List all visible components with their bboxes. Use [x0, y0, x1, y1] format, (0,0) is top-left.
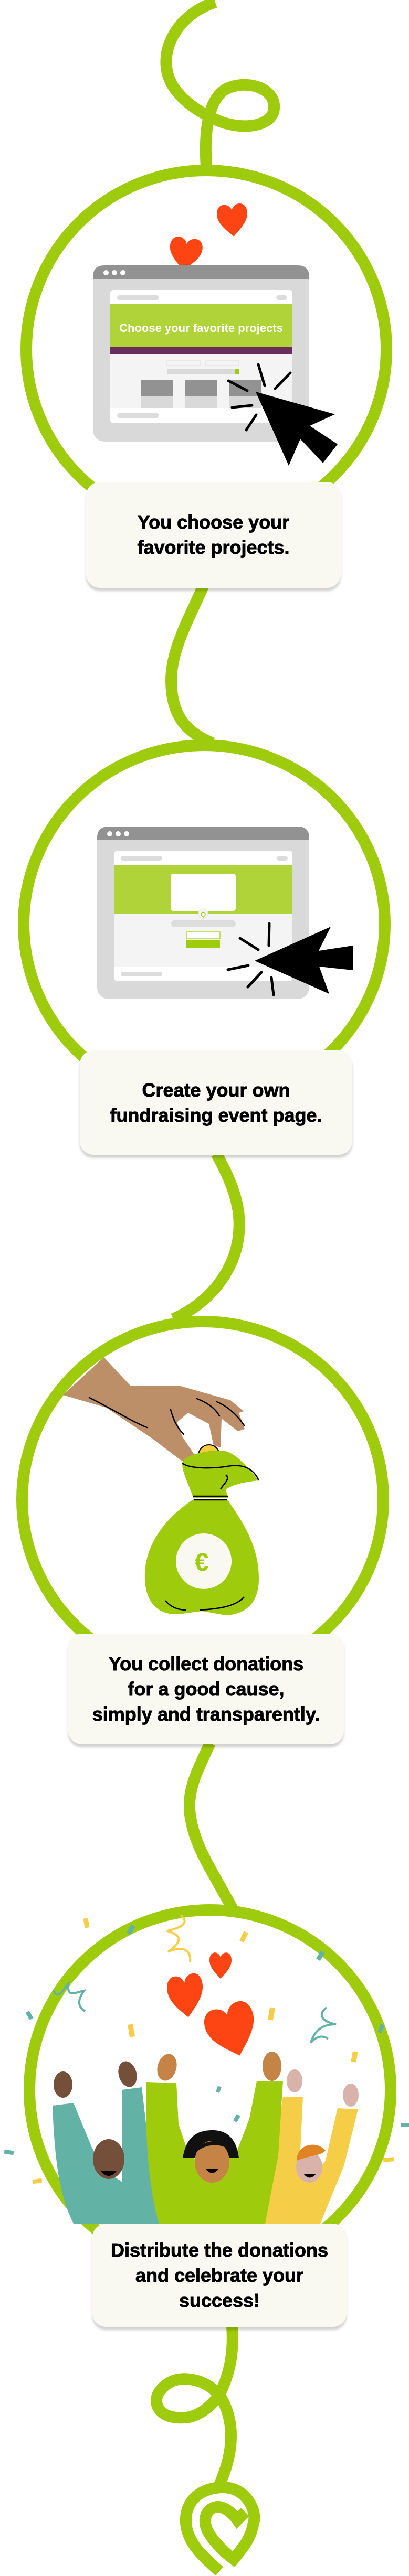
browser: fundraising page [97, 827, 309, 999]
callout: step 3: for a good cause, [128, 1678, 285, 1699]
callout: step 4 [92, 2224, 347, 2327]
money bag: € [195, 1549, 208, 1576]
person: teal sweater [53, 2059, 159, 2224]
browser: choose projects [93, 265, 309, 442]
logo: heart vine [186, 2487, 254, 2571]
ring: step 1 [26, 170, 386, 528]
cursor: step 1 [228, 364, 338, 466]
callout: step 2: fundraising event page. [110, 1104, 322, 1125]
callout: step 4: Distribute the donations [111, 2239, 328, 2260]
vine: stem connecting all steps [156, 2, 274, 2485]
ring: step 2 [24, 745, 385, 1103]
money bag [145, 1451, 259, 1615]
confetti [4, 1915, 409, 2184]
ring: step 3 [22, 1322, 383, 1677]
ring: step 4 [29, 1910, 391, 2270]
callout: step 4: and celebrate your [135, 2264, 303, 2285]
hand with coin [63, 1357, 245, 1466]
callout: step 3: You collect donations [109, 1653, 303, 1674]
callout: step 2: Create your own [142, 1079, 290, 1100]
callout: step 1 [86, 482, 341, 588]
people celebrating [53, 2052, 359, 2224]
icon: hearts step 1 [167, 203, 249, 272]
callout: step 4: success! [179, 2290, 260, 2311]
callout: step 2 [80, 1050, 352, 1155]
browser: choose projects: Choose your favorite projects [119, 321, 283, 335]
callout: step 1: You choose your [138, 511, 289, 533]
callout: step 3: simply and transparently. [92, 1703, 320, 1724]
hearts: celebration [166, 1952, 264, 2064]
callout: step 3 [68, 1634, 344, 1744]
person: yellow sweater [263, 2069, 359, 2224]
person: green sweater [146, 2052, 283, 2224]
callout: step 1: favorite projects. [137, 536, 290, 558]
cursor: step 2 [228, 924, 353, 995]
hand with coin: € [205, 1449, 213, 1463]
